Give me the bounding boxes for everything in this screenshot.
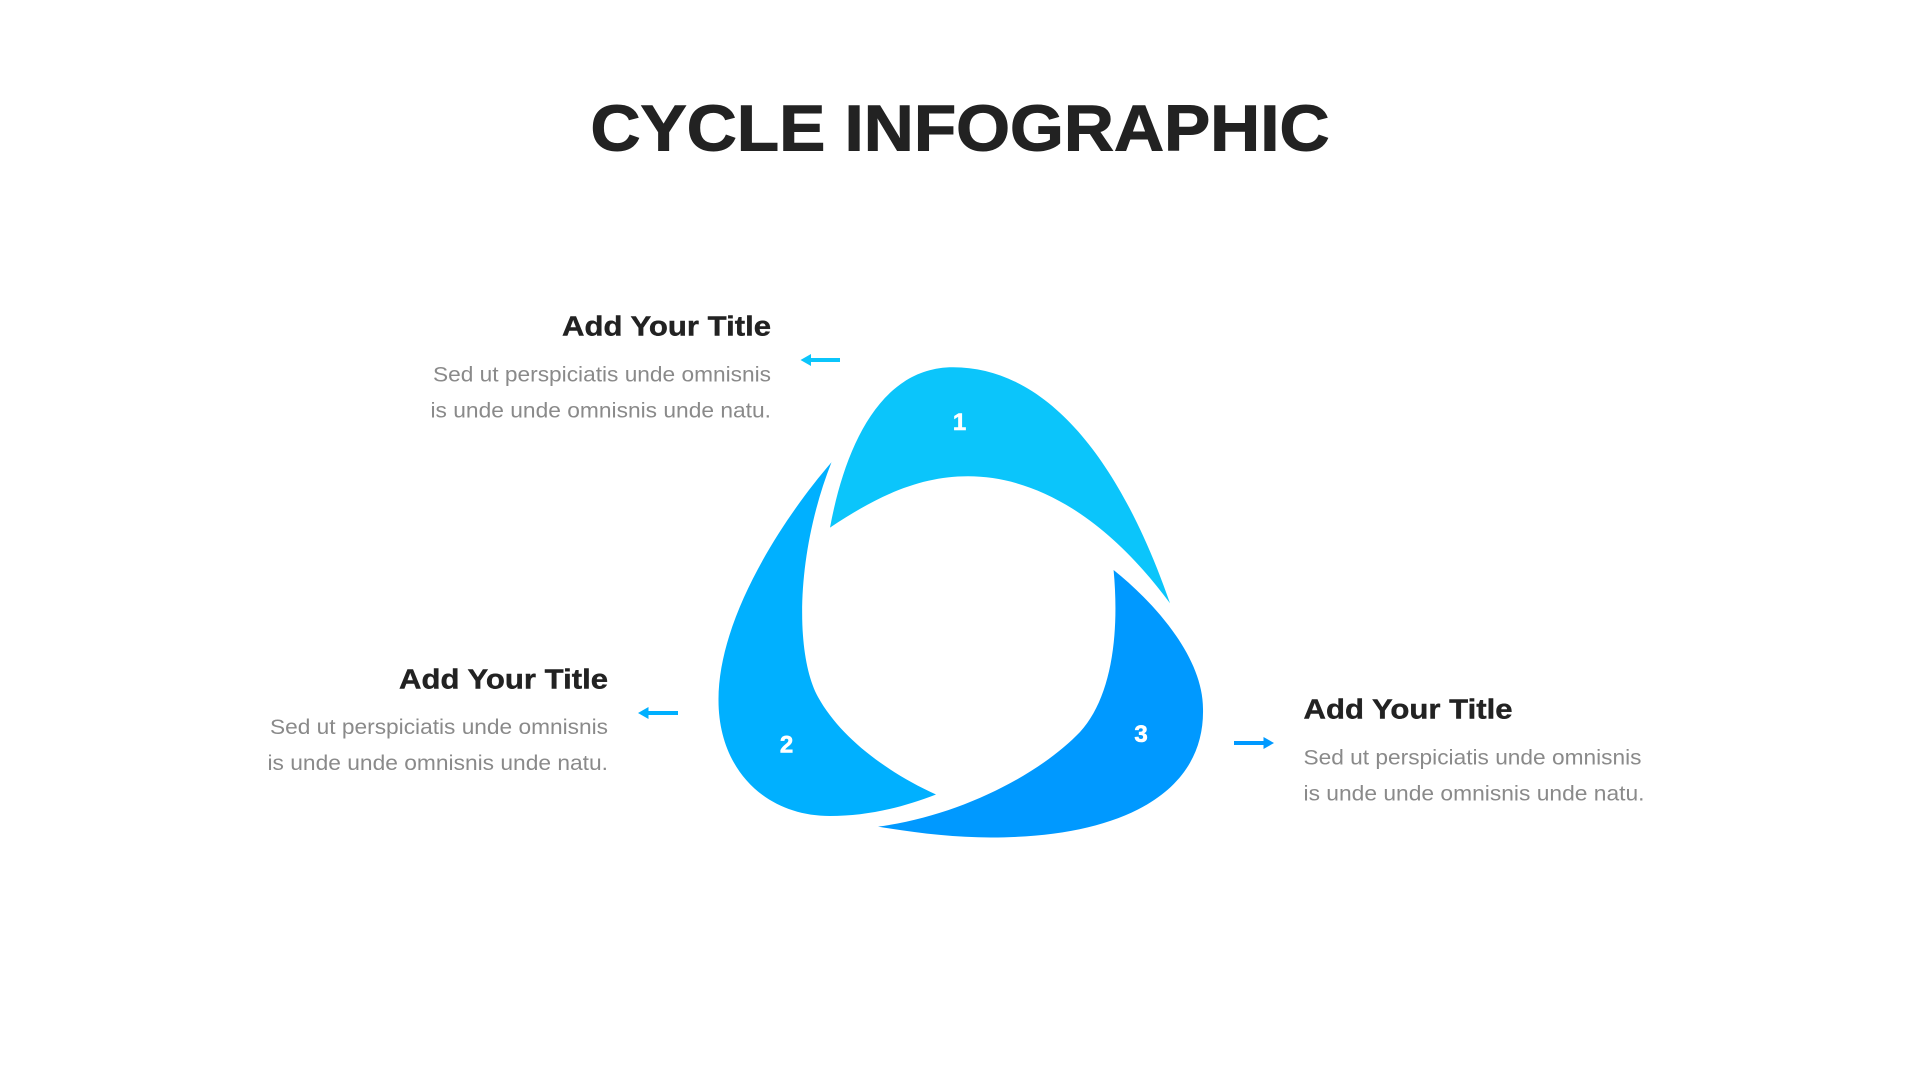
- callout 3: [1304, 694, 1644, 806]
- segment 3: 3: [1134, 721, 1148, 748]
- callout 1: [430, 310, 771, 422]
- callout 2: [268, 664, 608, 775]
- segment 1: [830, 367, 1170, 603]
- segment 1: 1: [953, 409, 966, 436]
- cycle diagram: [718, 367, 1203, 838]
- callout 1 heading: Add Your Title: [562, 310, 771, 342]
- callout 3 body: Sed ut perspiciatis unde omnisnis: [1304, 746, 1642, 770]
- callout 2 body: is unde unde omnisnis unde natu.: [268, 752, 608, 775]
- segment 3: [878, 570, 1203, 838]
- arrow 2: [638, 707, 678, 719]
- arrow 1: [800, 354, 840, 366]
- callout 2 body: Sed ut perspiciatis unde omnisnis: [270, 716, 608, 739]
- callout 1 body: is unde unde omnisnis unde natu.: [430, 400, 771, 422]
- segment 2: [718, 462, 936, 816]
- title: CYCLE INFOGRAPHIC: [590, 92, 1330, 164]
- callout 2 heading: Add Your Title: [399, 664, 608, 694]
- callout 3 heading: Add Your Title: [1304, 694, 1512, 724]
- arrow 3: [1234, 737, 1274, 749]
- segment 2: 2: [780, 732, 793, 758]
- callout 3 body: is unde unde omnisnis unde natu.: [1304, 782, 1644, 806]
- callout 1 body: Sed ut perspiciatis unde omnisnis: [433, 364, 771, 386]
